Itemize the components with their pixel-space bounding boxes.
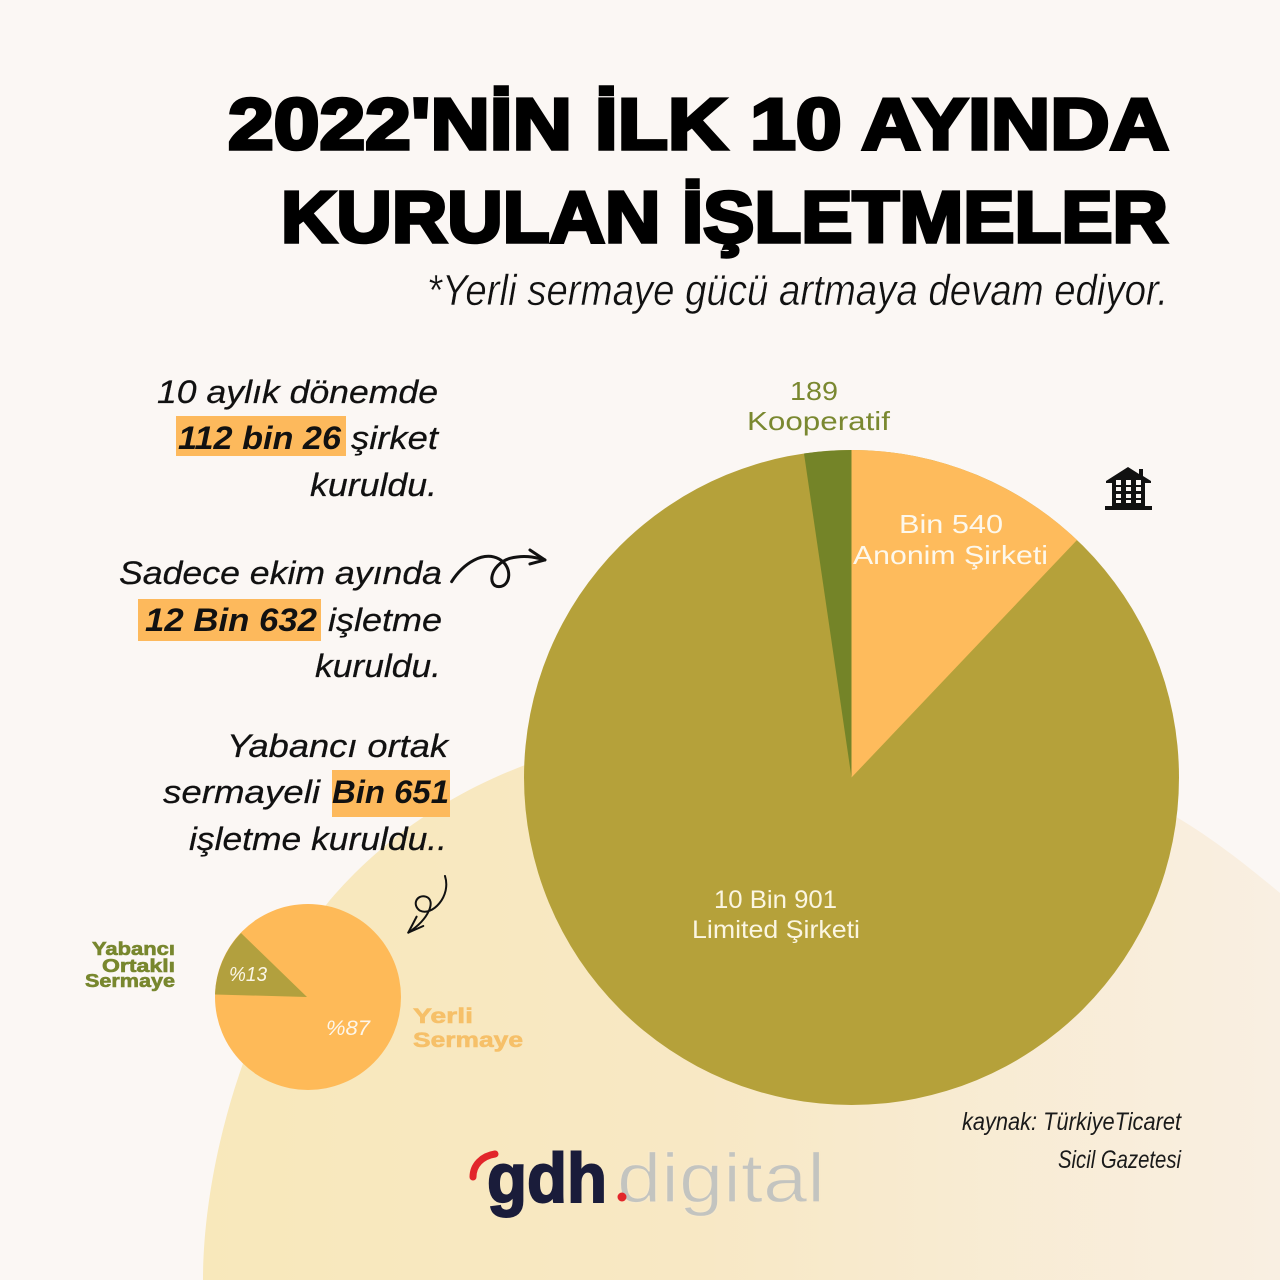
logo: gdh digital: gdh — [487, 1139, 607, 1217]
small pie chart: capital share: %87 — [326, 1017, 371, 1040]
label: limited — [692, 886, 860, 944]
label: limited: Limited Şirketi — [692, 916, 860, 944]
label: cooperative — [747, 376, 891, 436]
text block: total companies: kuruldu. — [310, 467, 437, 503]
title — [228, 85, 1169, 258]
text block: october: işletme — [328, 602, 442, 638]
source note — [962, 1108, 1182, 1174]
text block: total companies: 112 bin 26 — [178, 420, 341, 456]
text block: foreign capital: işletme kuruldu.. — [189, 821, 447, 857]
label: foreign capital — [85, 939, 175, 991]
text block: october — [119, 555, 442, 684]
text block: october: kuruldu. — [315, 648, 441, 684]
text block: foreign capital: Bin 651 — [332, 774, 449, 810]
label: domestic capital: Sermaye — [413, 1029, 523, 1052]
background blob — [203, 717, 1280, 1280]
title: 2022'NİN İLK 10 AYINDA — [228, 85, 1169, 165]
label: anonim: Bin 540 — [899, 509, 1003, 539]
text block: foreign capital: Yabancı ortak — [227, 728, 450, 764]
small pie chart: capital share: %13 — [229, 964, 267, 986]
source note: Sicil Gazetesi — [1058, 1146, 1182, 1174]
label: domestic capital: Yerli — [413, 1005, 473, 1028]
arrow: curly down — [408, 876, 446, 933]
label: cooperative: 189 — [790, 376, 838, 406]
text block: total companies: şirket — [351, 420, 439, 456]
label: domestic capital — [413, 1005, 523, 1052]
label: foreign capital: Sermaye — [85, 971, 175, 991]
label: anonim: Anonim Şirketi — [853, 540, 1048, 570]
logo: gdh digital — [473, 1139, 825, 1217]
label: limited: 10 Bin 901 — [714, 886, 837, 914]
source note: kaynak: TürkiyeTicaret — [962, 1108, 1182, 1136]
large pie chart: company types — [524, 450, 1179, 1105]
label: foreign capital: Ortaklı — [102, 956, 175, 976]
text block: total companies — [157, 374, 439, 503]
label: anonim — [853, 509, 1048, 570]
text block: october: Sadece ekim ayında — [119, 555, 442, 591]
text block: foreign capital — [163, 728, 450, 857]
text block: foreign capital: sermayeli — [163, 774, 321, 810]
arrow: curly right — [452, 550, 545, 587]
subtitle: *Yerli sermaye gücü artmaya devam ediyor. — [427, 266, 1168, 315]
text block: october: 12 Bin 632 — [145, 602, 317, 638]
icon: building — [1105, 467, 1152, 510]
text block: total companies: 10 aylık dönemde — [157, 374, 438, 410]
label: foreign capital: Yabancı — [92, 939, 175, 959]
label: cooperative: Kooperatif — [747, 406, 891, 436]
logo: gdh digital: digital — [617, 1139, 825, 1217]
small pie chart: capital share — [215, 904, 401, 1090]
title: KURULAN İŞLETMELER — [281, 178, 1168, 258]
